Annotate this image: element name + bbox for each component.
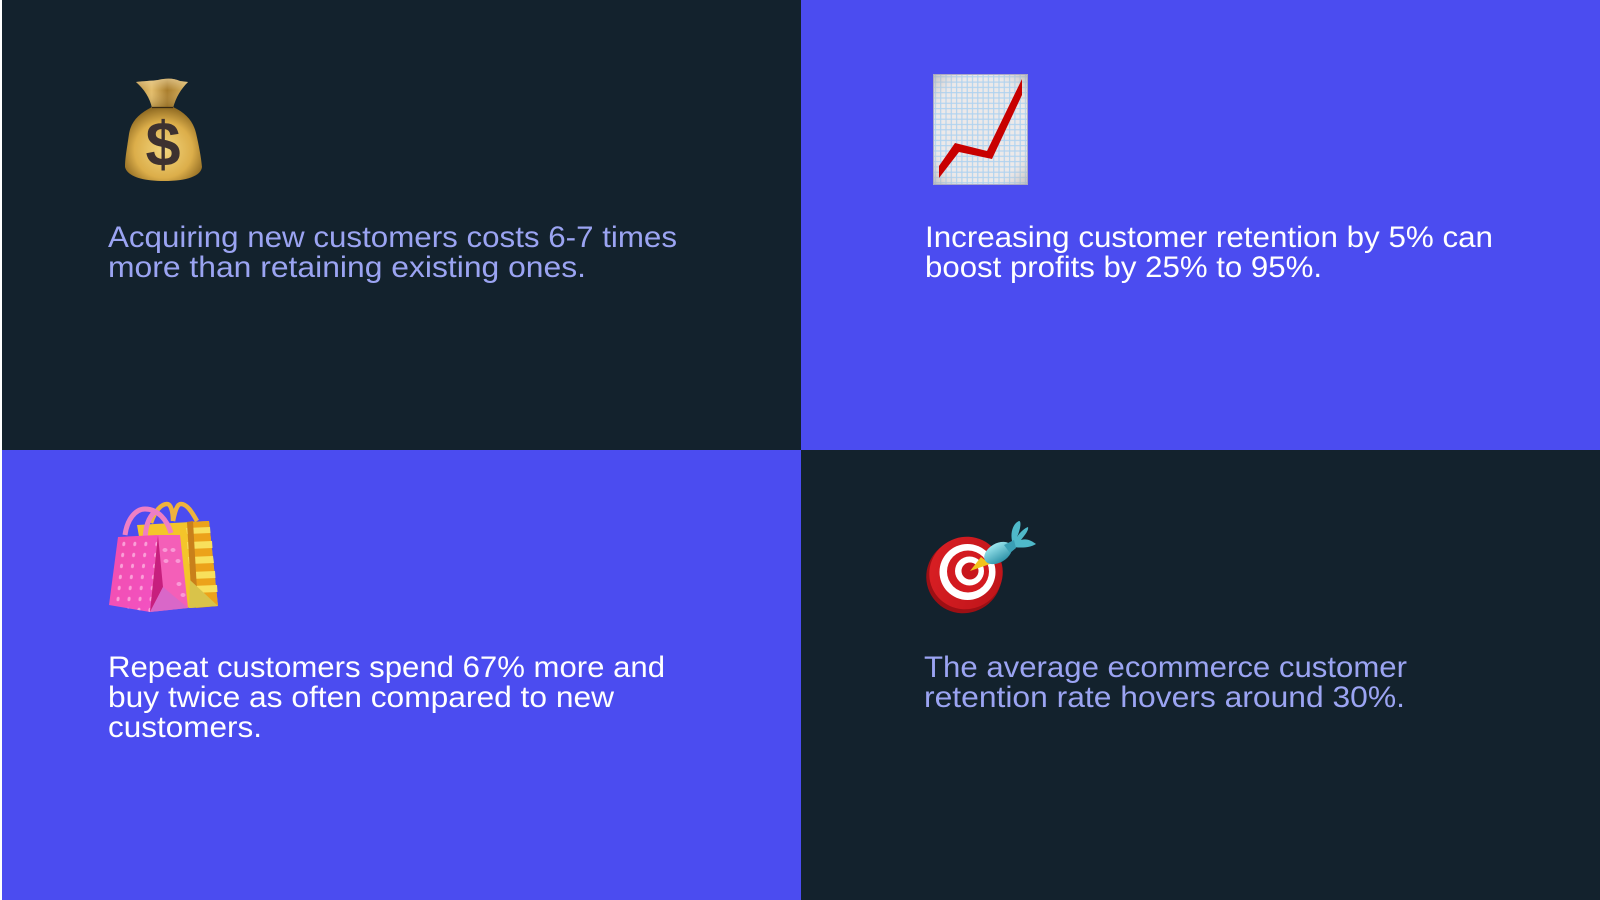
text: repeat customers fact: buy twice as often compared to new xyxy=(108,681,614,714)
icon: chart increasing xyxy=(934,74,1028,184)
text: repeat customers fact: customers. xyxy=(108,711,262,744)
panel: acquisition cost xyxy=(2,0,801,450)
text: profit fact: boost profits by 25% to 95%. xyxy=(925,251,1322,284)
icon: bullseye with dart xyxy=(913,521,1036,627)
text: acquisition fact: more than retaining existing ones. xyxy=(108,251,586,284)
text: profit fact xyxy=(925,221,1493,284)
icon: money bag xyxy=(125,79,202,181)
text: acquisition fact xyxy=(108,221,677,284)
text: acquisition fact: Acquiring new customers costs 6-7 times xyxy=(108,221,677,254)
icon: shopping bags xyxy=(109,504,218,612)
text: retention rate fact xyxy=(924,651,1407,714)
text: retention rate fact: retention rate hovers around 30%. xyxy=(924,681,1405,714)
panel: retention profit xyxy=(801,0,1600,450)
text: repeat customers fact xyxy=(108,651,665,744)
text: retention rate fact: The average ecommerce customer xyxy=(924,651,1407,684)
icon: money bag: $ xyxy=(145,110,181,180)
panel: average retention xyxy=(801,450,1600,900)
text: profit fact: Increasing customer retention by 5% can xyxy=(925,221,1493,254)
panel: repeat customers xyxy=(2,450,801,900)
text: repeat customers fact: Repeat customers spend 67% more and xyxy=(108,651,665,684)
